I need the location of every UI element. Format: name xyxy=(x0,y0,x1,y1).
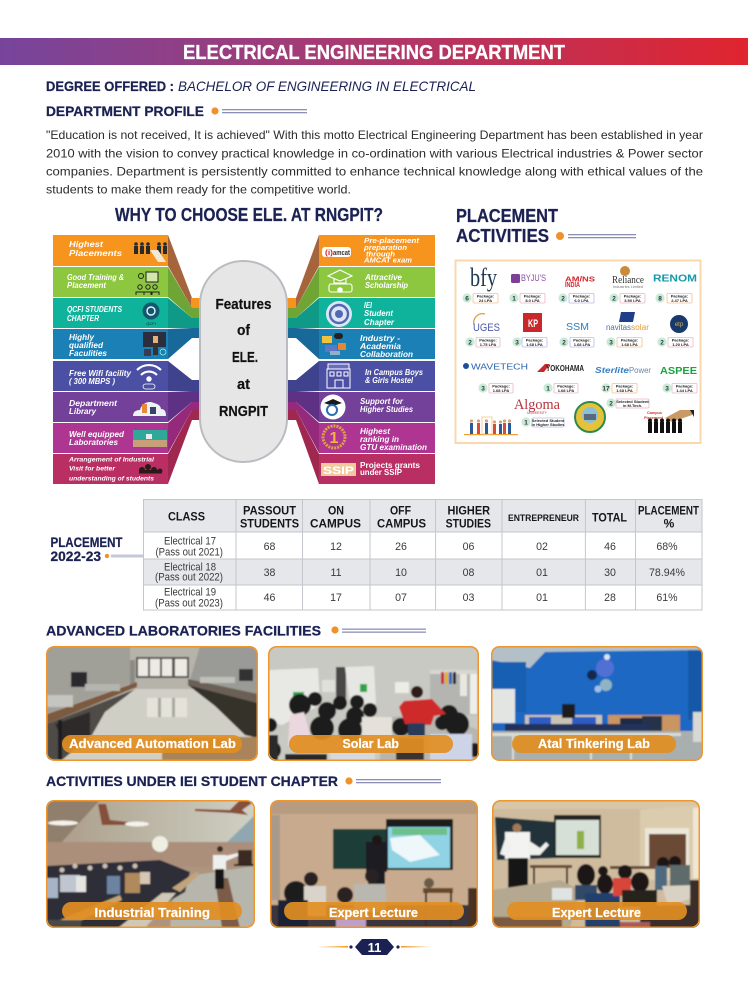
label: Industrial Training xyxy=(94,905,210,920)
center pill: ELE. xyxy=(232,349,258,366)
placement activities heading: PLACEMENT xyxy=(456,206,558,226)
logo row 3: Sterlite xyxy=(595,366,630,375)
table rows: Electrical 18 xyxy=(164,562,216,574)
package badges: Package: xyxy=(676,384,693,389)
table header: ENTREPRENEUR xyxy=(508,513,579,524)
package badges: 1.20 LPA xyxy=(672,342,689,347)
algoma logo and students xyxy=(514,397,565,427)
icon: rank one xyxy=(323,426,345,448)
algoma logo and students: Algoma xyxy=(514,397,560,413)
activities heading: ACTIVITIES UNDER IEI STUDENT CHAPTER xyxy=(46,773,338,789)
left labels: Good Training & xyxy=(67,273,124,282)
right labels: preparation xyxy=(363,245,407,252)
label: Advanced Automation Lab xyxy=(69,736,236,751)
logo row 2: UGES xyxy=(473,322,500,334)
package badges: 3 xyxy=(609,339,613,346)
placement 2022-23 label: PLACEMENT xyxy=(50,535,123,550)
table rows: Electrical 17 xyxy=(164,536,216,548)
algoma logo and students: UNIVERSITY xyxy=(527,411,548,415)
icon: hostel xyxy=(327,364,350,388)
icon: qcfi: QCFI xyxy=(146,321,156,326)
table rows: 17 xyxy=(330,592,342,604)
logo row 1: bfy xyxy=(470,263,497,292)
features diagram xyxy=(53,235,435,484)
package badges: 8.0 LPA xyxy=(525,298,540,303)
selected m.tech badge: in M.Tech. xyxy=(623,403,642,408)
department profile paragraph: "Education is not received, It is achieved" With this motto Electrical Engineering Department has been established in year xyxy=(46,129,703,142)
right labels: through xyxy=(366,252,395,258)
selected m.tech badge xyxy=(606,398,649,408)
center pill: at xyxy=(237,376,250,393)
logo row 1: INDIA xyxy=(565,282,580,289)
table rows: 46 xyxy=(264,592,275,604)
placement table xyxy=(143,499,702,610)
package badges: Package: xyxy=(557,384,575,389)
right labels: & Girls Hostel xyxy=(365,376,414,385)
package badges: 6 xyxy=(465,295,469,302)
table header: PLACEMENT xyxy=(638,506,699,518)
right labels: Industry - xyxy=(360,334,400,343)
package badges: Package: xyxy=(492,384,510,389)
label xyxy=(507,902,687,920)
left labels: Placement xyxy=(67,281,106,290)
photo: advanced automation lab xyxy=(46,646,258,761)
package badges: 6.0 LPA xyxy=(574,298,589,303)
left labels: Visit for better xyxy=(69,466,115,472)
why choose heading: WHY TO CHOOSE ELE. AT RNGPIT? xyxy=(115,205,383,225)
logo row 2: etp xyxy=(675,322,684,328)
label: Expert Lecture xyxy=(329,905,418,920)
package badges: 2 xyxy=(468,339,472,346)
table rows: (Pass out 2022) xyxy=(155,572,223,584)
left labels: Placements xyxy=(69,249,123,258)
label: Atal Tinkering Lab xyxy=(538,736,650,751)
table rows xyxy=(155,536,686,610)
connectors right xyxy=(287,235,319,484)
illustration: campus placement: Placement xyxy=(644,416,664,420)
left labels xyxy=(67,240,154,482)
icon: library xyxy=(133,402,166,416)
left labels: Highest xyxy=(69,240,103,249)
right labels: IEI xyxy=(364,301,373,310)
package badges: Package: xyxy=(524,294,541,299)
package badges: Package: xyxy=(477,294,494,299)
placement activities heading xyxy=(456,206,636,246)
logo row 1: RENOM xyxy=(653,274,697,284)
left labels: Arrangement of Industrial xyxy=(68,456,154,464)
table rows: 07 xyxy=(395,592,407,604)
logo row 2: navitas xyxy=(606,323,631,332)
table rows: 78.94% xyxy=(649,567,686,579)
table header: CAMPUS xyxy=(310,516,361,530)
package badges: Package: xyxy=(624,294,641,299)
icon: amcat: (i) xyxy=(325,248,334,257)
photo: solar lab xyxy=(263,646,482,761)
icon: faculty board xyxy=(143,332,166,356)
title: ELECTRICAL ENGINEERING DEPARTMENT xyxy=(183,42,565,64)
degree offered heading xyxy=(46,78,476,94)
package badges: Package: xyxy=(479,338,497,343)
package badges: 2.47 LPA xyxy=(671,298,688,303)
package badges: 8 xyxy=(658,295,662,302)
package badges: Package: xyxy=(573,338,591,343)
label: Solar Lab xyxy=(342,736,399,751)
package badges: Package: xyxy=(616,384,633,389)
package badges: 1.68 LPA xyxy=(621,342,638,347)
package badges: 3 xyxy=(481,385,485,392)
header band xyxy=(0,38,748,65)
placement activities heading: ACTIVITIES xyxy=(456,226,549,246)
package badges: 1 xyxy=(546,385,550,392)
left bars xyxy=(53,235,168,484)
right labels: ranking in xyxy=(360,435,399,444)
package badges: 2 xyxy=(660,339,664,346)
illustration: campus placement: Campus xyxy=(647,411,662,415)
right labels: Scholarship xyxy=(365,281,408,290)
table rows: 01 xyxy=(536,567,548,579)
left labels: Well equipped xyxy=(69,430,125,439)
panel: recruiter logos xyxy=(456,260,700,443)
package badges: 2 xyxy=(561,295,565,302)
right labels: Support for xyxy=(360,397,404,406)
table rows: 68 xyxy=(264,541,275,553)
package badges: Package: xyxy=(671,294,688,299)
package badges: 3 xyxy=(665,385,669,392)
table rows: Electrical 19 xyxy=(164,587,216,599)
page number xyxy=(317,939,431,955)
package badges: 1.68 LPA xyxy=(558,388,574,393)
right labels: Student xyxy=(364,309,393,318)
center pill xyxy=(200,261,287,462)
photo: expert lecture one xyxy=(270,800,478,928)
table rows: 28 xyxy=(604,592,616,604)
degree offered heading: DEGREE OFFERED : xyxy=(46,78,174,94)
table rows: 02 xyxy=(536,541,548,553)
icon: higher studies xyxy=(320,394,346,420)
illustration: students group xyxy=(464,417,518,435)
placement 2022-23 label: 2022-23 xyxy=(50,549,101,564)
table rows: 03 xyxy=(463,592,474,604)
illustration: campus placement xyxy=(644,410,694,433)
icon: qcfi xyxy=(142,302,160,326)
table rows: (Pass out 2021) xyxy=(156,547,223,559)
table rows: 08 xyxy=(463,567,474,579)
algoma logo and students: in Higher Studies xyxy=(532,422,565,427)
logo row 3: YOKOHAMA xyxy=(546,364,584,373)
package badges: Package: xyxy=(573,294,590,299)
placement 2022-23 label xyxy=(50,535,143,564)
table header: CAMPUS xyxy=(377,516,426,530)
package badges: 1.68 LPA xyxy=(493,388,509,393)
advanced laboratories heading: ADVANCED LABORATORIES FACILITIES xyxy=(46,622,321,638)
package badges: 1.68 LPA xyxy=(574,342,590,347)
icon: collaboration xyxy=(322,333,346,355)
right labels: Attractive xyxy=(364,273,403,282)
table rows: 46 xyxy=(604,541,616,553)
right labels: AMCAT exam xyxy=(363,258,412,264)
logo row 3: ASPEE xyxy=(660,365,697,377)
logo row 2: SSM xyxy=(566,322,589,333)
table header: HIGHER xyxy=(448,504,490,518)
icon: graduation cap xyxy=(328,270,352,292)
icon: iei seal xyxy=(326,301,352,327)
photo: industrial training xyxy=(46,800,255,928)
photo: expert lecture two xyxy=(492,800,700,928)
logo row 1 xyxy=(470,263,697,292)
left labels: Department xyxy=(69,399,117,408)
package badges: 1.44 LPA xyxy=(676,388,693,393)
table rows: 01 xyxy=(536,592,548,604)
icon: industrial visit xyxy=(139,464,162,474)
university seal xyxy=(575,402,605,432)
table header: STUDIES xyxy=(446,516,491,530)
table header: PASSOUT xyxy=(243,504,297,518)
icon: amcat: amcat xyxy=(333,248,350,257)
table rows: 26 xyxy=(395,541,407,553)
package badges: 1.68 LPA xyxy=(616,388,633,393)
logo row 1: AM/NS xyxy=(565,274,595,284)
package badges xyxy=(462,293,697,393)
logo row 1: Reliance xyxy=(612,275,645,286)
table header xyxy=(168,504,699,530)
table header: STUDENTS xyxy=(240,516,299,530)
icon: rank one: 1 xyxy=(330,430,339,447)
right labels: Highest xyxy=(360,427,390,436)
right labels: GTU examination xyxy=(360,443,427,452)
department profile paragraph: 2010 with the vision to convey practical knowledge in co-ordination with various Electrical industries & Power sector xyxy=(46,148,703,160)
table rows: (Pass out 2023) xyxy=(155,598,223,610)
package badges: 1.75 LPA xyxy=(480,342,496,347)
selected m.tech badge: 2 xyxy=(609,400,613,407)
right labels xyxy=(359,238,427,477)
table rows: 38 xyxy=(264,567,275,579)
table rows: 61% xyxy=(656,592,678,604)
icon: amcat xyxy=(322,247,351,257)
department profile paragraph: companies. Department is persistently committed to enhance technical knowledge along with ethical values of the xyxy=(46,166,703,178)
degree offered heading: BACHELOR OF ENGINEERING IN ELECTRICAL xyxy=(178,78,476,94)
left labels: Laboratories xyxy=(69,438,119,447)
right labels: under SSIP xyxy=(360,468,403,477)
left labels: Free Wifi facility xyxy=(69,369,132,378)
right labels: Collaboration xyxy=(360,350,413,359)
table header: TOTAL xyxy=(592,510,627,524)
label xyxy=(289,735,453,753)
logo row 3: WAVETECH xyxy=(471,362,528,372)
table rows: 11 xyxy=(330,567,342,579)
table rows: 30 xyxy=(604,567,616,579)
label xyxy=(62,902,242,920)
department profile heading: DEPARTMENT PROFILE xyxy=(46,103,204,119)
package badges: 3 xyxy=(515,339,519,346)
center pill: Features xyxy=(216,296,272,313)
logo row 2: solar xyxy=(631,323,649,332)
right bars xyxy=(319,235,435,484)
right labels: Higher Studies xyxy=(360,405,414,414)
right labels: Projects grants xyxy=(360,461,421,470)
department profile heading xyxy=(46,103,307,119)
logo row 3 xyxy=(463,362,697,377)
left labels: Faculities xyxy=(69,349,108,358)
right labels: In Campus Boys xyxy=(365,368,424,377)
package badges: 1 xyxy=(512,295,516,302)
photo: atal tinkering lab xyxy=(491,646,703,761)
package badges: 2 xyxy=(612,295,616,302)
left labels: Library xyxy=(69,407,97,416)
label: Expert Lecture xyxy=(552,905,641,920)
table rows: 12 xyxy=(330,541,342,553)
table rows: 10 xyxy=(395,567,407,579)
left labels: CHAPTER xyxy=(67,314,99,323)
connectors left xyxy=(168,235,200,484)
center pill: RNGPIT xyxy=(219,403,268,420)
icon: ssip: SSIP xyxy=(323,465,354,477)
icon: ssip xyxy=(321,463,356,477)
table header: ON xyxy=(328,504,344,518)
table header: % xyxy=(664,516,675,530)
icon: placements people xyxy=(134,242,167,262)
package badges: 1.68 LPA xyxy=(526,342,543,347)
icon: laboratories xyxy=(133,430,167,447)
table header: CLASS xyxy=(168,510,205,524)
department profile paragraph: students to make them ready for the competitive world. xyxy=(46,184,351,196)
label xyxy=(512,735,676,753)
label xyxy=(284,902,464,920)
package badges: 24 LPA xyxy=(479,298,492,303)
right labels: Chapter xyxy=(364,318,395,327)
table header: OFF xyxy=(390,504,411,518)
package badges: Package: xyxy=(621,338,638,343)
algoma logo and students: 1 xyxy=(524,419,528,426)
logo row 3: Power xyxy=(629,366,651,375)
table rows: 06 xyxy=(463,541,474,553)
left labels: understanding of students xyxy=(69,476,154,482)
left labels: qualified xyxy=(69,341,104,350)
logo row 2 xyxy=(473,312,688,334)
icon: training xyxy=(136,272,159,295)
icon: wifi xyxy=(137,365,161,389)
table rows: 68% xyxy=(656,541,678,553)
left labels: ( 300 MBPS ) xyxy=(69,377,115,386)
left labels: QCFI STUDENTS xyxy=(67,305,123,314)
package badges: Package: xyxy=(672,338,689,343)
center pill: of xyxy=(237,322,251,339)
algoma logo and students: Selected Student xyxy=(532,418,565,423)
selected m.tech badge: Selected Student xyxy=(616,399,649,404)
page number: 11 xyxy=(368,940,381,955)
logo row 1: BYJU'S xyxy=(521,273,546,283)
logo row 2: KP xyxy=(528,318,538,330)
package badges: 17 xyxy=(602,385,610,392)
department profile paragraph xyxy=(46,129,703,196)
right labels: Academia xyxy=(359,342,402,351)
package badges: 2 xyxy=(562,339,566,346)
package badges: Package: xyxy=(526,338,543,343)
right labels: Pre-placement xyxy=(364,238,420,245)
left labels: Highly xyxy=(69,333,95,342)
package badges: 3.50 LPA xyxy=(624,298,641,303)
logo row 1: Industries Limited xyxy=(613,285,643,289)
